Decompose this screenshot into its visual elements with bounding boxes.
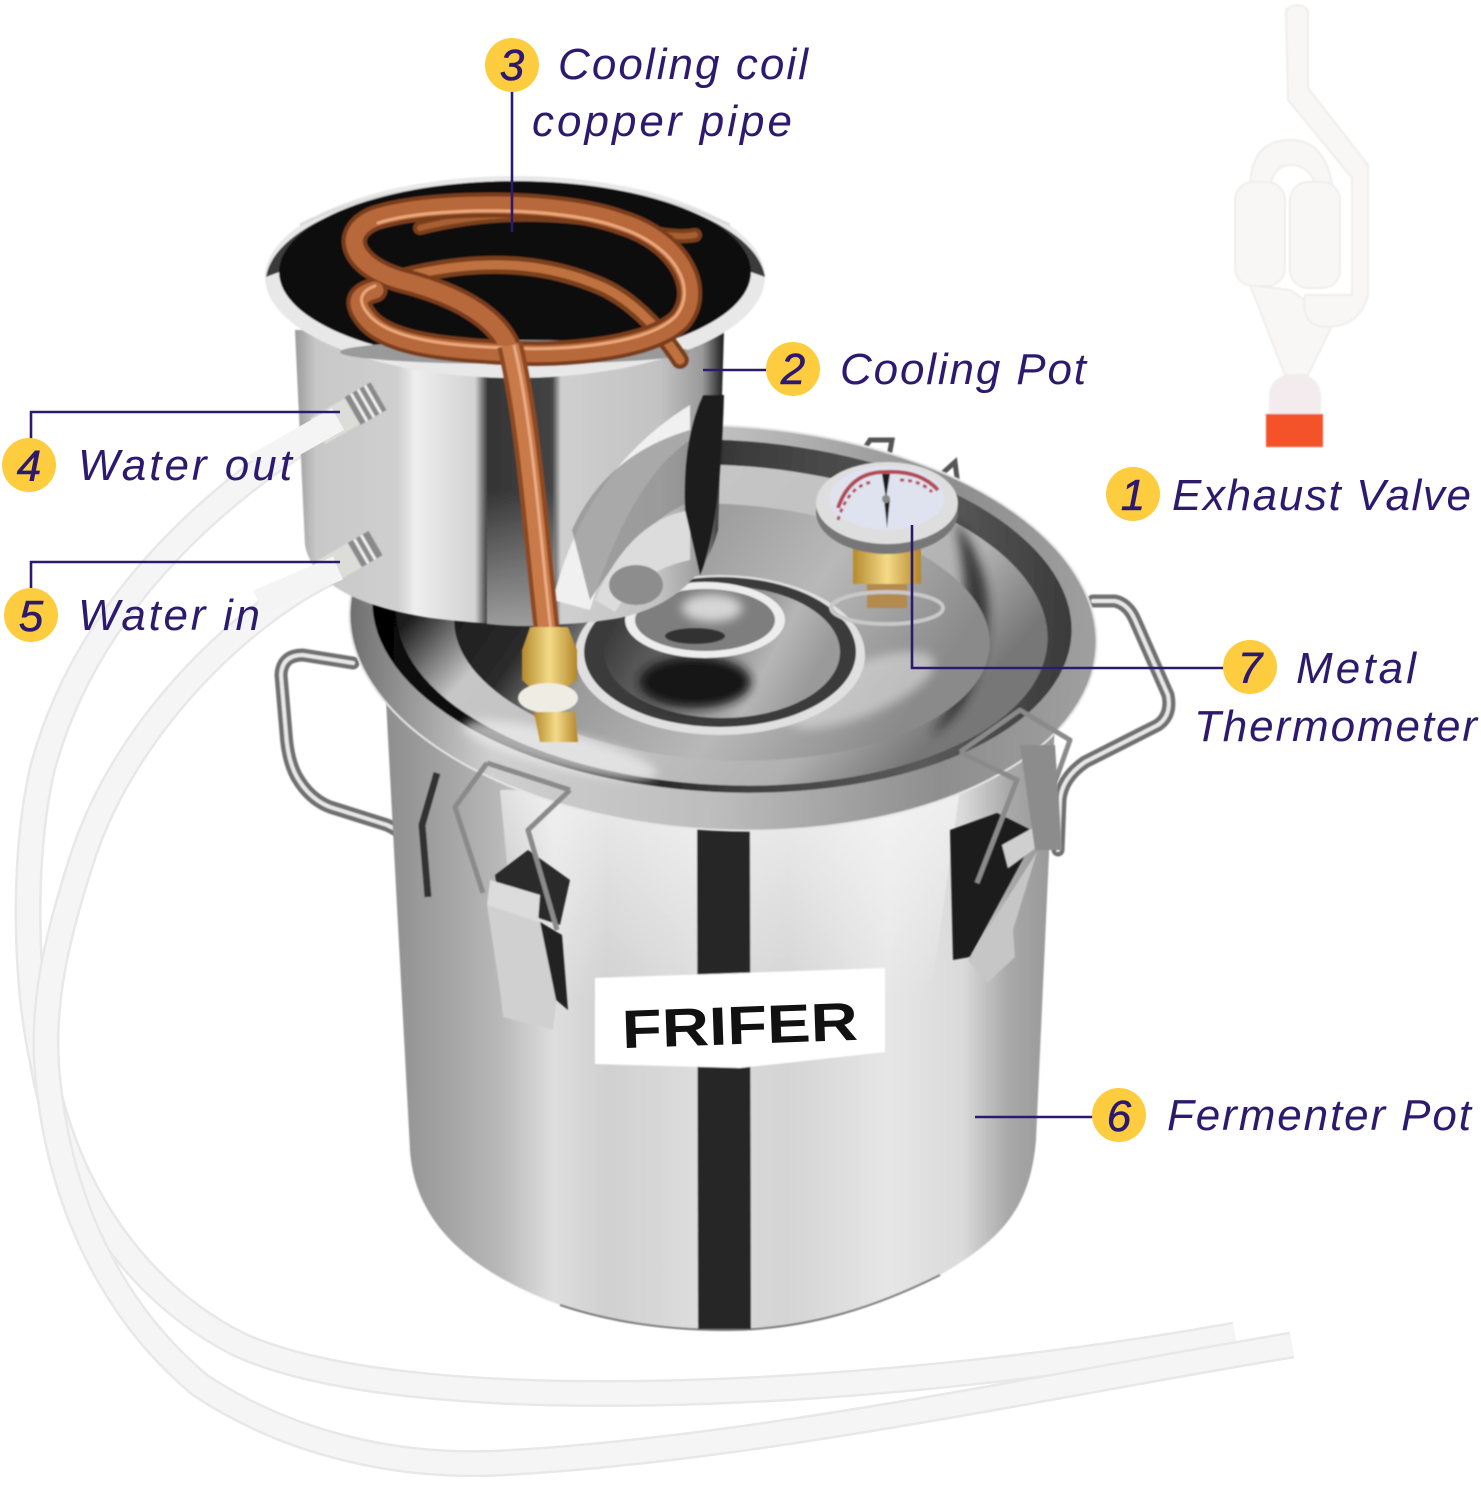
water in fitting bbox=[315, 531, 383, 586]
latch: right bbox=[950, 710, 1070, 983]
label: 3 cooling coil copper pipe: copper pipe bbox=[532, 97, 792, 146]
coil front ring bbox=[354, 205, 690, 354]
tube ends over cooling pot bbox=[255, 419, 338, 602]
label: 7 metal thermometer: 7 bbox=[1238, 644, 1264, 693]
label: 7 metal thermometer: Metal bbox=[1296, 644, 1417, 693]
dark crescent bbox=[930, 520, 989, 735]
copper pipe bbox=[510, 345, 552, 640]
silver band bbox=[388, 448, 1056, 802]
capsule right bbox=[1290, 182, 1340, 288]
capsule left bbox=[1235, 182, 1285, 286]
label: 2 cooling pot: Cooling Pot bbox=[840, 345, 1088, 394]
cooling pot bbox=[265, 176, 765, 742]
handle: left bbox=[281, 655, 416, 903]
rim bbox=[265, 176, 765, 378]
bezel bbox=[816, 470, 958, 554]
pot body bbox=[386, 700, 1056, 1330]
clips behind lid bbox=[856, 440, 958, 486]
label: 5 water in bbox=[4, 588, 260, 642]
label: 7 metal thermometer: Thermometer bbox=[1194, 702, 1479, 751]
inner dome bbox=[575, 575, 865, 735]
label: 6 fermenter pot: Fermenter Pot bbox=[1167, 1091, 1473, 1140]
label: 7 metal thermometer bbox=[1194, 640, 1479, 751]
leader lines bbox=[31, 90, 1225, 1117]
lid bbox=[339, 407, 1107, 849]
orange cap bbox=[1266, 414, 1323, 447]
lower funnel bbox=[1250, 285, 1335, 375]
label: 4 water out: 4 bbox=[17, 442, 41, 491]
label: 3 cooling coil copper pipe bbox=[485, 38, 809, 146]
label: 2 cooling pot: 2 bbox=[780, 345, 805, 394]
label: 5 water in: 5 bbox=[19, 592, 44, 641]
pot body bbox=[295, 330, 724, 625]
brand name: FRIFER bbox=[621, 992, 859, 1060]
funnel knob bbox=[625, 582, 785, 658]
arch bbox=[1250, 140, 1332, 185]
brass fitting bbox=[853, 548, 921, 584]
upper dome bbox=[448, 490, 996, 774]
bottom edge shadow bbox=[560, 1275, 940, 1330]
water out fitting bbox=[310, 382, 387, 445]
label: 1 exhaust valve: 1 bbox=[1121, 471, 1145, 520]
left inner wire bbox=[422, 773, 437, 897]
label: 4 water out bbox=[2, 438, 294, 492]
handle: right bbox=[1058, 601, 1169, 850]
brand label bbox=[595, 968, 885, 1068]
black reflection stripe bbox=[697, 820, 751, 1329]
label: 1 exhaust valve: Exhaust Valve bbox=[1172, 471, 1471, 520]
latch: left bbox=[455, 763, 570, 1030]
thermometer gauge bbox=[816, 462, 958, 624]
dark side reflection bbox=[685, 395, 724, 575]
stripe fade at the bottom bbox=[487, 490, 555, 626]
bulb bbox=[1270, 375, 1320, 415]
dark step bbox=[363, 422, 1081, 810]
white ring bbox=[518, 683, 578, 713]
label: 4 water out: Water out bbox=[78, 441, 294, 490]
exhaust valve bbox=[1235, 5, 1368, 447]
label: 3 cooling coil copper pipe: Cooling coil bbox=[558, 40, 809, 89]
pot interior bbox=[279, 181, 751, 363]
label: 2 cooling pot bbox=[766, 342, 1088, 396]
coil rear parts bbox=[403, 215, 695, 360]
dial bbox=[829, 466, 945, 530]
label: 5 water in: Water in bbox=[78, 591, 260, 640]
outer tube bbox=[1286, 5, 1368, 327]
fermenter pot bbox=[281, 601, 1169, 1330]
silicone tubes bbox=[28, 415, 1292, 1464]
lid rim bbox=[339, 407, 1107, 849]
label: 6 fermenter pot: 6 bbox=[1107, 1092, 1132, 1141]
label: 3 cooling coil copper pipe: 3 bbox=[500, 41, 525, 90]
brass pipe nut bbox=[522, 627, 577, 693]
reflection band bbox=[553, 405, 690, 610]
